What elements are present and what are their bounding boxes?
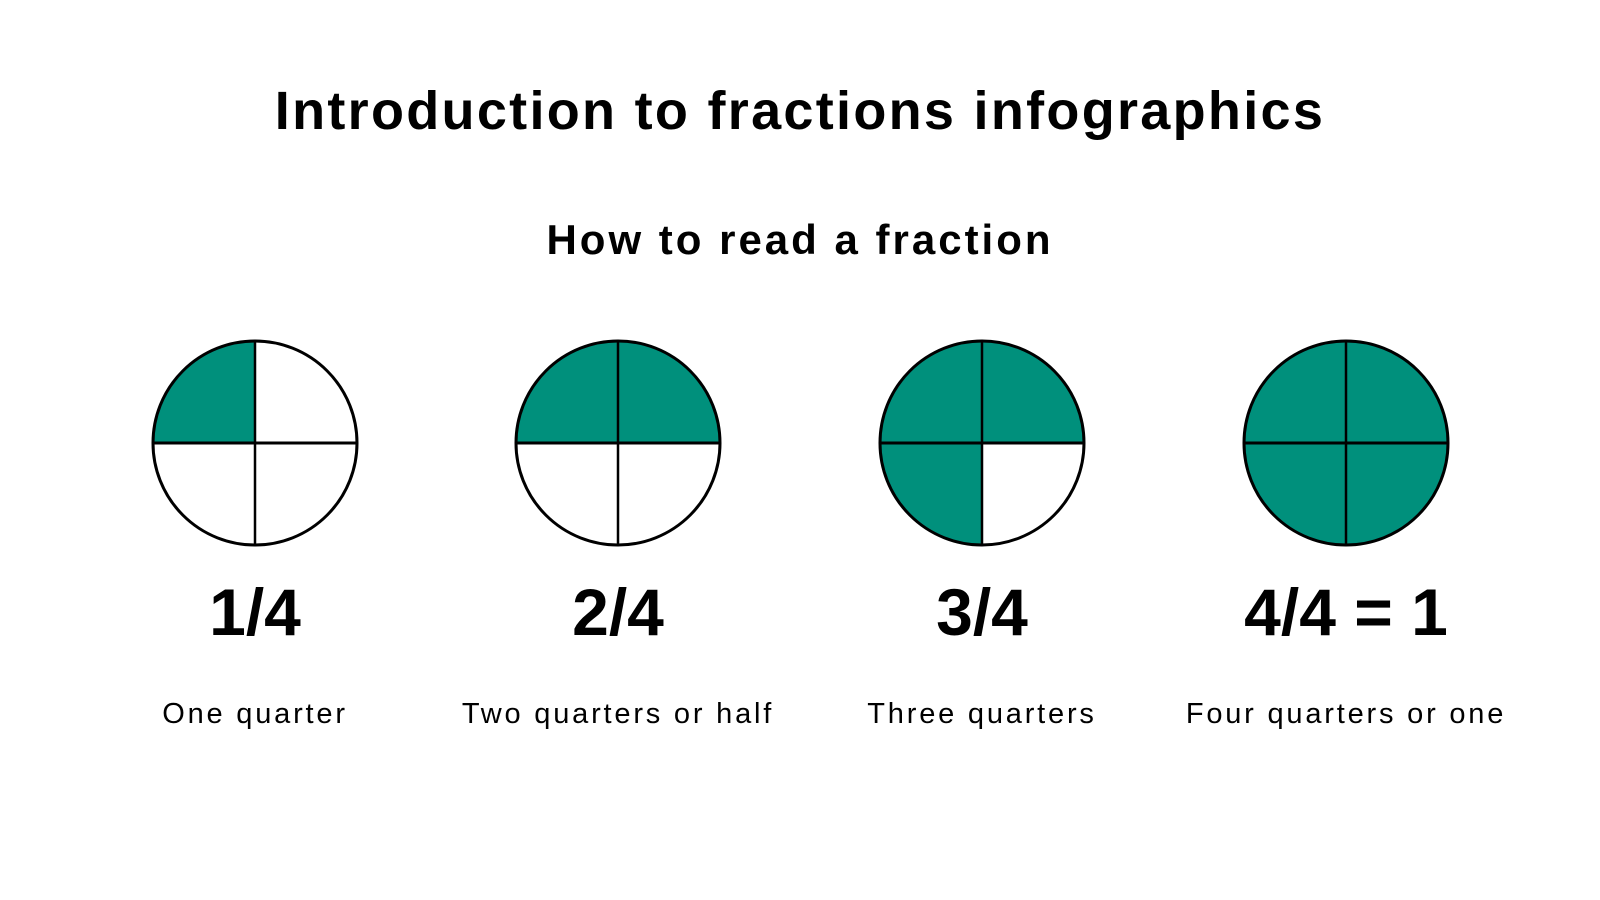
pie: 4/4 <box>1244 341 1448 545</box>
fraction 3/4: 3/4 <box>936 575 1028 649</box>
desc 3: Three quarters <box>867 698 1097 730</box>
desc 1: One quarter <box>162 698 348 730</box>
description labels <box>162 698 1506 730</box>
fraction 4/4: 4/4 = 1 <box>1244 575 1448 649</box>
title: Introduction to fractions infographics <box>275 81 1325 141</box>
fraction 2/4: 2/4 <box>572 575 664 649</box>
pie: 2/4 <box>516 341 720 545</box>
fraction labels <box>209 575 1448 649</box>
desc 2: Two quarters or half <box>462 698 774 730</box>
fraction 1/4: 1/4 <box>209 575 301 649</box>
subtitle: How to read a fraction <box>546 216 1054 263</box>
pie: 1/4 <box>153 341 357 545</box>
desc 4: Four quarters or one <box>1186 698 1506 730</box>
pie: 3/4 <box>880 341 1084 545</box>
